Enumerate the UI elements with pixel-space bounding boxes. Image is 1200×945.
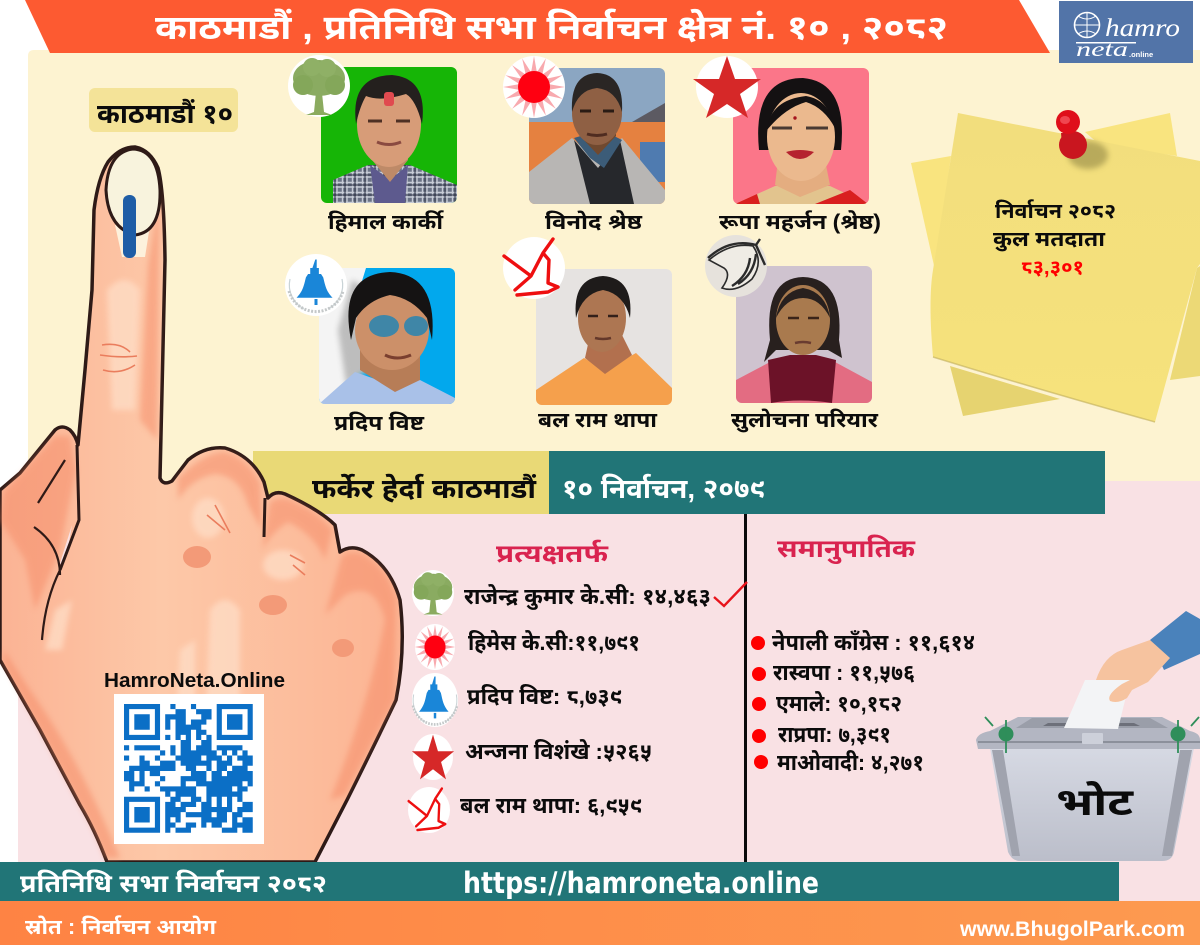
icon: tree [412, 570, 454, 616]
candidate: Pradip Bista [285, 254, 455, 435]
panel: cream strip behind band [28, 440, 1105, 481]
icon: sun [415, 624, 455, 670]
sleeve [1150, 611, 1200, 670]
icon: sun [503, 56, 565, 118]
candidate: Binod Shrestha [503, 56, 665, 234]
icon: mango [705, 235, 767, 297]
icon: plough [408, 787, 450, 833]
icon: star [693, 56, 761, 118]
name: सुलोचना परियार [731, 408, 879, 433]
constituency label [89, 88, 238, 132]
name: रूपा महर्जन (श्रेष्ठ) [719, 210, 881, 234]
QR block [104, 670, 285, 844]
knuckle creases [100, 344, 305, 575]
shading [0, 190, 396, 858]
note text: ८३,३०१ [1021, 257, 1084, 279]
front sheet [930, 113, 1200, 422]
candidate: Sulochana Pariyar [705, 235, 879, 433]
footer: orange bar: www.BhugolPark.com [959, 918, 1185, 941]
footer: teal bar: प्रतिनिधि सभा निर्वाचन २०८२ [20, 869, 327, 898]
back sheet bottom right [1170, 266, 1200, 380]
highlights [45, 280, 303, 740]
panel: proportional results [751, 534, 975, 775]
candidate: Bal Ram Thapa [503, 237, 672, 432]
panel: pink lower background [18, 481, 1200, 901]
constituency label: काठमाडौं १० [97, 98, 233, 129]
illustration: ballot box [976, 611, 1200, 861]
back sheet left [911, 156, 951, 270]
footer: orange bar: स्रोत : निर्वाचन आयोग [25, 915, 217, 939]
box label: भोट [1056, 780, 1134, 824]
illustration: hand with inked finger [0, 147, 402, 862]
note text: निर्वाचन २०८२ [995, 199, 1116, 223]
panel: direct results [408, 539, 747, 833]
footer: teal bar: https://hamroneta.online [463, 866, 819, 900]
band: looking back: १० निर्वाचन, २०७९ [562, 473, 765, 504]
row: नेपाली काँग्रेस : ११,६१४ [772, 630, 975, 655]
QR heading: HamroNeta.Online [104, 670, 285, 692]
result row: हिमेस के.सी:११,७९१ [468, 630, 640, 655]
icon: star [412, 734, 454, 780]
name: प्रदिप विष्ट [334, 411, 425, 435]
bullet [752, 729, 766, 743]
band: looking back [253, 451, 1105, 514]
note text: कुल मतदाता [993, 228, 1106, 252]
row: एमाले: १०,१८२ [776, 691, 902, 716]
icon: plough [503, 237, 565, 299]
name: बल राम थापा [538, 409, 658, 432]
bullet [751, 636, 765, 650]
pin shadow [1068, 141, 1108, 169]
knuckle marks [183, 546, 354, 657]
footer: orange bar [0, 901, 1200, 945]
candidate: Himal Karki [288, 55, 457, 234]
back sheet right [1085, 113, 1177, 156]
result row: अन्जना विशंखे :५२६५ [465, 739, 652, 764]
row: राप्रपा: ७,३९१ [778, 722, 891, 747]
note text [993, 199, 1116, 279]
heading: प्रत्यक्षतर्फ [496, 539, 609, 568]
row: माओवादी: ४,२७१ [777, 750, 924, 775]
sticky note [911, 110, 1200, 422]
back sheet bottom [950, 366, 1060, 416]
pin [1056, 110, 1087, 159]
row: रास्वपा : ११,५७६ [773, 660, 915, 685]
icon: tree [288, 55, 350, 117]
ballot paper [1064, 680, 1130, 729]
ink mark [123, 195, 136, 258]
name: विनोद श्रेष्ठ [545, 210, 643, 234]
voting hand [1096, 640, 1170, 702]
result row: प्रदिप विष्ट: ८,७३९ [467, 684, 622, 709]
gap between thumb and finger [60, 525, 72, 568]
result row: राजेन्द्र कुमार के.सी: १४,४६३ [464, 584, 711, 610]
footer: teal bar [0, 862, 1119, 901]
bullet [754, 755, 768, 769]
icon: bell [412, 673, 458, 727]
candidate: Rupa Maharjan [693, 56, 881, 234]
nail bed [115, 225, 150, 257]
winner tick [714, 582, 747, 606]
logo: HamroNeta: neta [1076, 37, 1128, 61]
logo: HamroNeta: .online [1129, 50, 1153, 59]
logo: HamroNeta: hamro [1105, 15, 1180, 42]
name: हिमाल कार्की [328, 210, 444, 234]
box lid [976, 717, 1200, 749]
logo: HamroNeta [1059, 1, 1193, 63]
seals [985, 717, 1199, 753]
box body [990, 748, 1194, 861]
thumb lines [34, 460, 65, 640]
icon: bell [285, 254, 347, 316]
band: looking back: फर्केर हेर्दा काठमाडौं [312, 473, 537, 504]
panel: cream upper background [28, 50, 1200, 490]
heading: समानुपातिक [777, 534, 916, 564]
bullet [752, 697, 766, 711]
nail [106, 149, 160, 235]
bullet [752, 667, 766, 681]
result row: बल राम थापा: ६,९५९ [460, 793, 642, 818]
title banner [25, 0, 1050, 53]
title banner: काठमाडौं , प्रतिनिधि सभा निर्वाचन क्षेत्र नं. १० , २०८२ [155, 8, 948, 47]
QR code [114, 694, 264, 844]
divider [744, 514, 747, 862]
